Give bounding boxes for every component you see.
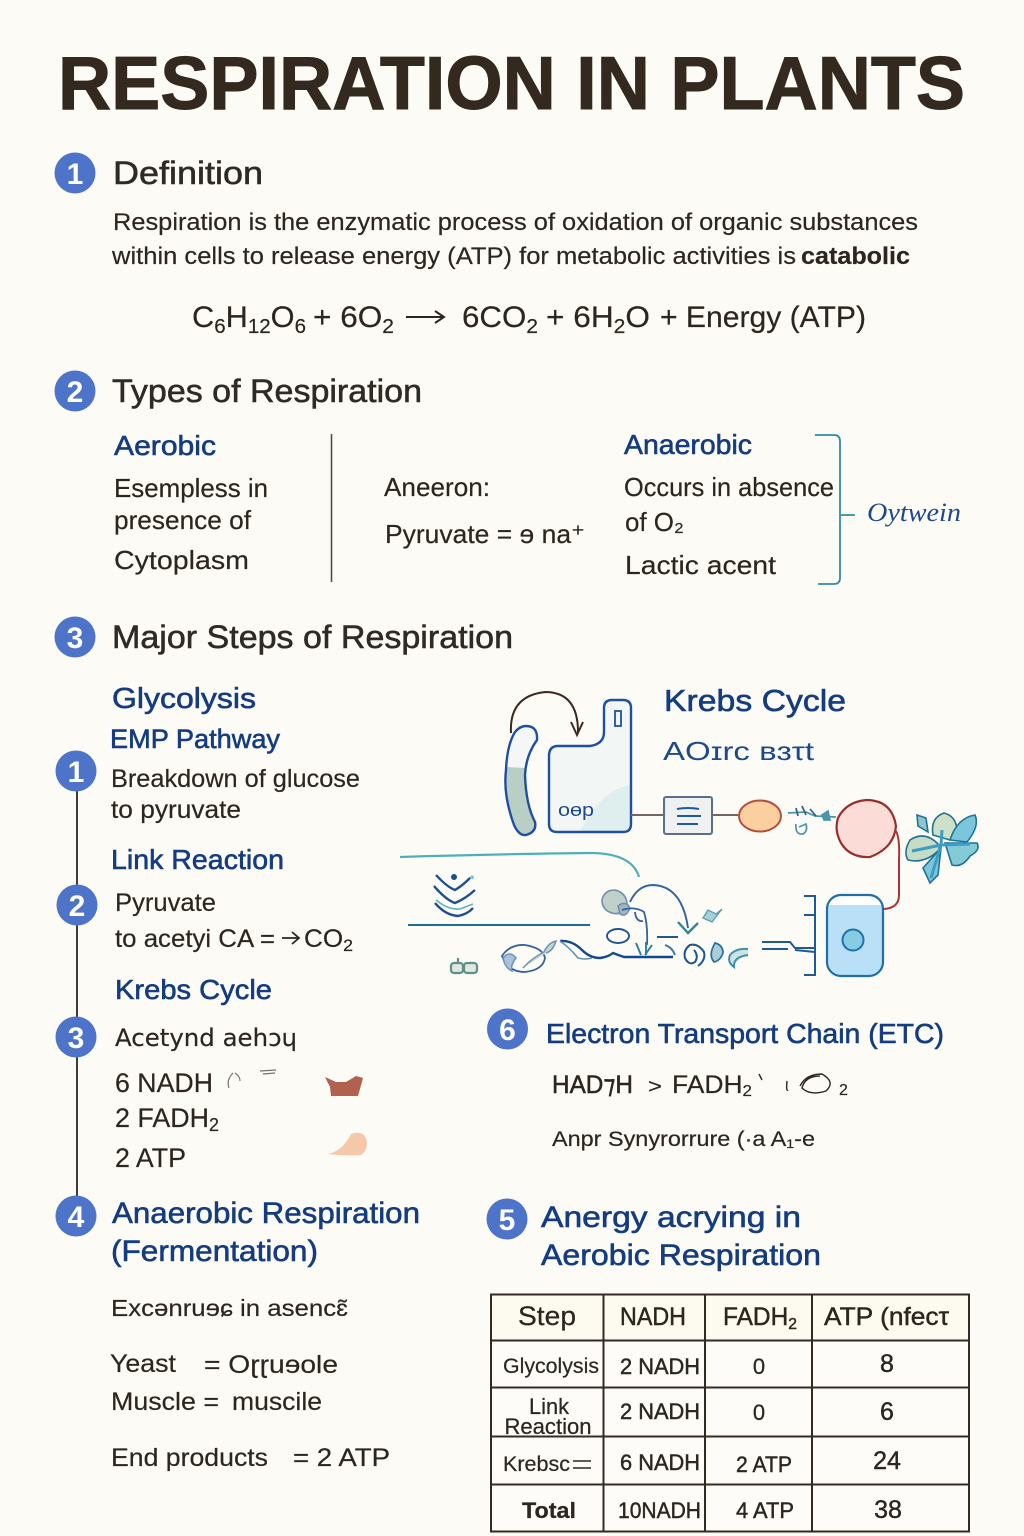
dash [657,936,678,938]
step: glycolysis: EMP Pathway [110,724,280,754]
middle column: Aneeron: [384,472,490,502]
badge 4 [56,1196,96,1236]
table header: FADH [723,1303,790,1331]
equation: 6 [295,316,306,338]
fermentation text: End products [111,1444,268,1472]
middle column [384,472,585,549]
step: krebs cycle: 2 FADH [115,1103,210,1133]
heading block: major steps [54,616,513,658]
etc equation: 2 [839,1082,848,1099]
definition text: Respiration is the enzymatic process of oxidation of organic substances [113,209,918,236]
connector 2 [712,814,738,816]
table rows: 24 [873,1447,901,1475]
connector to cell [884,830,899,909]
small sprig [788,806,836,834]
table rows: 10NADH [618,1498,701,1523]
step: krebs cycle: Acetynd aehɔɥ [115,1024,297,1052]
head blob [602,890,627,914]
curl stem [622,908,647,945]
fermentation text: Yeast [110,1350,176,1378]
heading: etc: Electron Transport Chain (ETC) [546,1018,944,1049]
title: RESPIRATION IN PLANTS [58,41,965,125]
table rows: 4 ATP [736,1498,794,1523]
table rows [503,1350,902,1524]
heading: major steps: Major Steps of Respiration [112,619,513,655]
icon: peach shape [327,1133,367,1155]
step: krebs cycle [115,974,367,1173]
fermentation text: Muscle = [111,1388,219,1416]
step: link reaction: 2 [343,936,353,955]
equation: 6CO [462,301,524,334]
pink circle [837,800,896,857]
equation: O [271,301,295,334]
heading: definition: Definition [113,155,263,191]
teal curve [400,853,639,877]
equation: 2 [526,316,538,338]
table: atp yield [491,1294,969,1532]
tube organ [505,726,537,835]
step: krebs cycle: 2 [209,1115,219,1135]
badge 5: 5 [499,1204,515,1237]
step: link reaction: Link Reaction [111,844,284,875]
krebs heading: Krebs Cycle [664,683,846,718]
badge 6 [487,1008,528,1050]
step badge 1: 1 [68,756,84,789]
anaerobic column: of O₂ [625,507,684,537]
table rows: 2 NADH [620,1399,700,1424]
orange oval [739,800,781,832]
table rows: 0 [753,1354,765,1379]
step: krebs cycle: Krebs Cycle [115,974,272,1005]
badge 2: 2 [67,376,83,409]
equation: 12 [248,316,271,338]
table rows: Krebsc [503,1453,570,1476]
icon: red shape [325,1076,363,1096]
equation: + 6H [546,301,610,334]
equation: + 6O [313,301,379,334]
table rows: Glycolysis [503,1355,599,1378]
leaves [711,943,723,962]
step: glycolysis: Breakdown of glucose [111,765,360,793]
fermentation text [110,1295,390,1472]
badge 5 [486,1198,528,1240]
badge 2 [54,370,96,412]
step: glycolysis: to pyruvate [111,796,241,824]
step: krebs cycle: 6 NADH [115,1068,213,1098]
left blob [502,945,545,972]
curved arrow [511,692,583,735]
equation [192,301,866,338]
equation: + Energy (ATP) [660,301,866,334]
definition text: catabolic [801,243,910,270]
badge 1 [54,152,96,194]
equation: 6 [214,316,226,338]
anaerobic column [624,429,834,580]
aerobic column: Aerobic [114,430,216,461]
equation: 2 [614,316,625,338]
etc text: Anpr Synyrorrure (·a A₁-e [552,1128,815,1151]
spiral [685,945,704,966]
table rows: 2 ATP [736,1452,792,1477]
step badge 1 [56,750,96,792]
etc equation [552,1071,848,1100]
squiggle network [502,885,748,972]
panel: electron transport chain [487,1008,944,1151]
table rows: 38 [874,1496,902,1524]
badge 4: 4 [68,1201,85,1234]
step: krebs cycle: 2 ATP [115,1143,186,1173]
illustration: krebs cycle pathway [400,683,978,976]
blue cell [827,895,883,976]
panel: types of respiration [54,370,961,584]
equation: C [192,301,214,334]
badge 3: 3 [67,622,83,655]
oval [607,929,629,943]
panel: fermentation: (Fermentation) [111,1235,318,1268]
heading: fermentation: Anaerobic Respiration [112,1197,420,1230]
comb lines [762,896,815,975]
step: link reaction: Pyruvate [115,889,216,917]
step badge 3: 3 [68,1022,84,1055]
panel: energy table heading [486,1198,821,1272]
step: link reaction: to acetyi CA = [115,925,275,953]
heading: energy: Anergy acrying in [541,1201,801,1234]
box icon [664,797,712,834]
teal line [408,924,590,926]
equation: H [226,301,248,334]
etc equation: > [648,1076,662,1098]
equation: O [625,301,650,334]
table rows: 6 NADH [620,1450,700,1475]
arc arrow [630,885,688,928]
definition text: within cells to release energy (ATP) for metabolic activities is [111,243,796,270]
aerobic column: presence of [114,505,252,535]
etc equation: HAD⁊H [552,1071,633,1099]
table rows: Total [522,1498,576,1523]
table header: NADH [620,1303,686,1331]
table header [518,1301,949,1333]
chevron waves icon [434,874,475,916]
etc equation: 2 [743,1083,752,1100]
table rows: 8 [880,1350,894,1378]
step: link reaction: CO [304,925,342,953]
step badge 2 [56,884,98,926]
fermentation text: = 2 ATP [293,1444,390,1472]
sprout [636,942,652,955]
equation: 2 [382,316,394,338]
aerobic column: Cytoplasm [114,545,249,575]
fermentation text: Excənruɘɕ in asencɛ̃ [111,1295,348,1321]
middle column: Pyruvate = ɘ na⁺ [385,519,585,549]
flask shape: oөp [558,800,594,820]
definition text [111,209,918,270]
main line [560,941,673,958]
panel: energy table heading: Aerobic Respiration [541,1239,821,1272]
anaerobic column: Lactic acent [625,550,777,580]
fermentation text: muscile [232,1388,322,1416]
anaerobic column: Anaerobic [624,429,752,460]
krebs subtitle: AOɪrc ʙɜτt [663,736,815,766]
table rows: 6 [880,1398,894,1426]
step: glycolysis: Glycolysis [112,683,256,715]
badge 1: 1 [67,158,83,191]
aerobic column: Esempless in [114,473,268,503]
heading: types: Types of Respiration [112,373,422,409]
table rows: Link [529,1394,570,1419]
timeline [56,750,98,1196]
icon: teal flower [906,813,978,883]
small teal icon [451,958,477,973]
step: glycolysis [110,683,360,824]
badge 6: 6 [499,1014,516,1047]
small marks [228,1070,276,1088]
step: link reaction [111,844,353,955]
table header: ATP (nfecτ [824,1303,949,1331]
panel: fermentation [56,1196,420,1472]
bracket [815,435,855,584]
anaerobic column: Occurs in absence [624,472,834,502]
table header: 2 [788,1316,797,1333]
etc equation: FADH [672,1071,739,1099]
table header: Step [518,1301,576,1331]
badge 3 [54,616,96,658]
table rows: 2 NADH [620,1354,700,1379]
connector 1 [631,814,663,816]
bracket label: Oytwein [867,498,961,527]
step badge 3 [56,1016,96,1058]
table rows: Reaction [504,1414,592,1439]
fermentation text: = Oɽɽuɘole [204,1351,338,1379]
flask shape [549,700,631,832]
step badge 2: 2 [69,890,85,923]
table rows: 0 [753,1400,765,1425]
panel: definition [54,152,918,338]
aerobic column [114,430,268,575]
